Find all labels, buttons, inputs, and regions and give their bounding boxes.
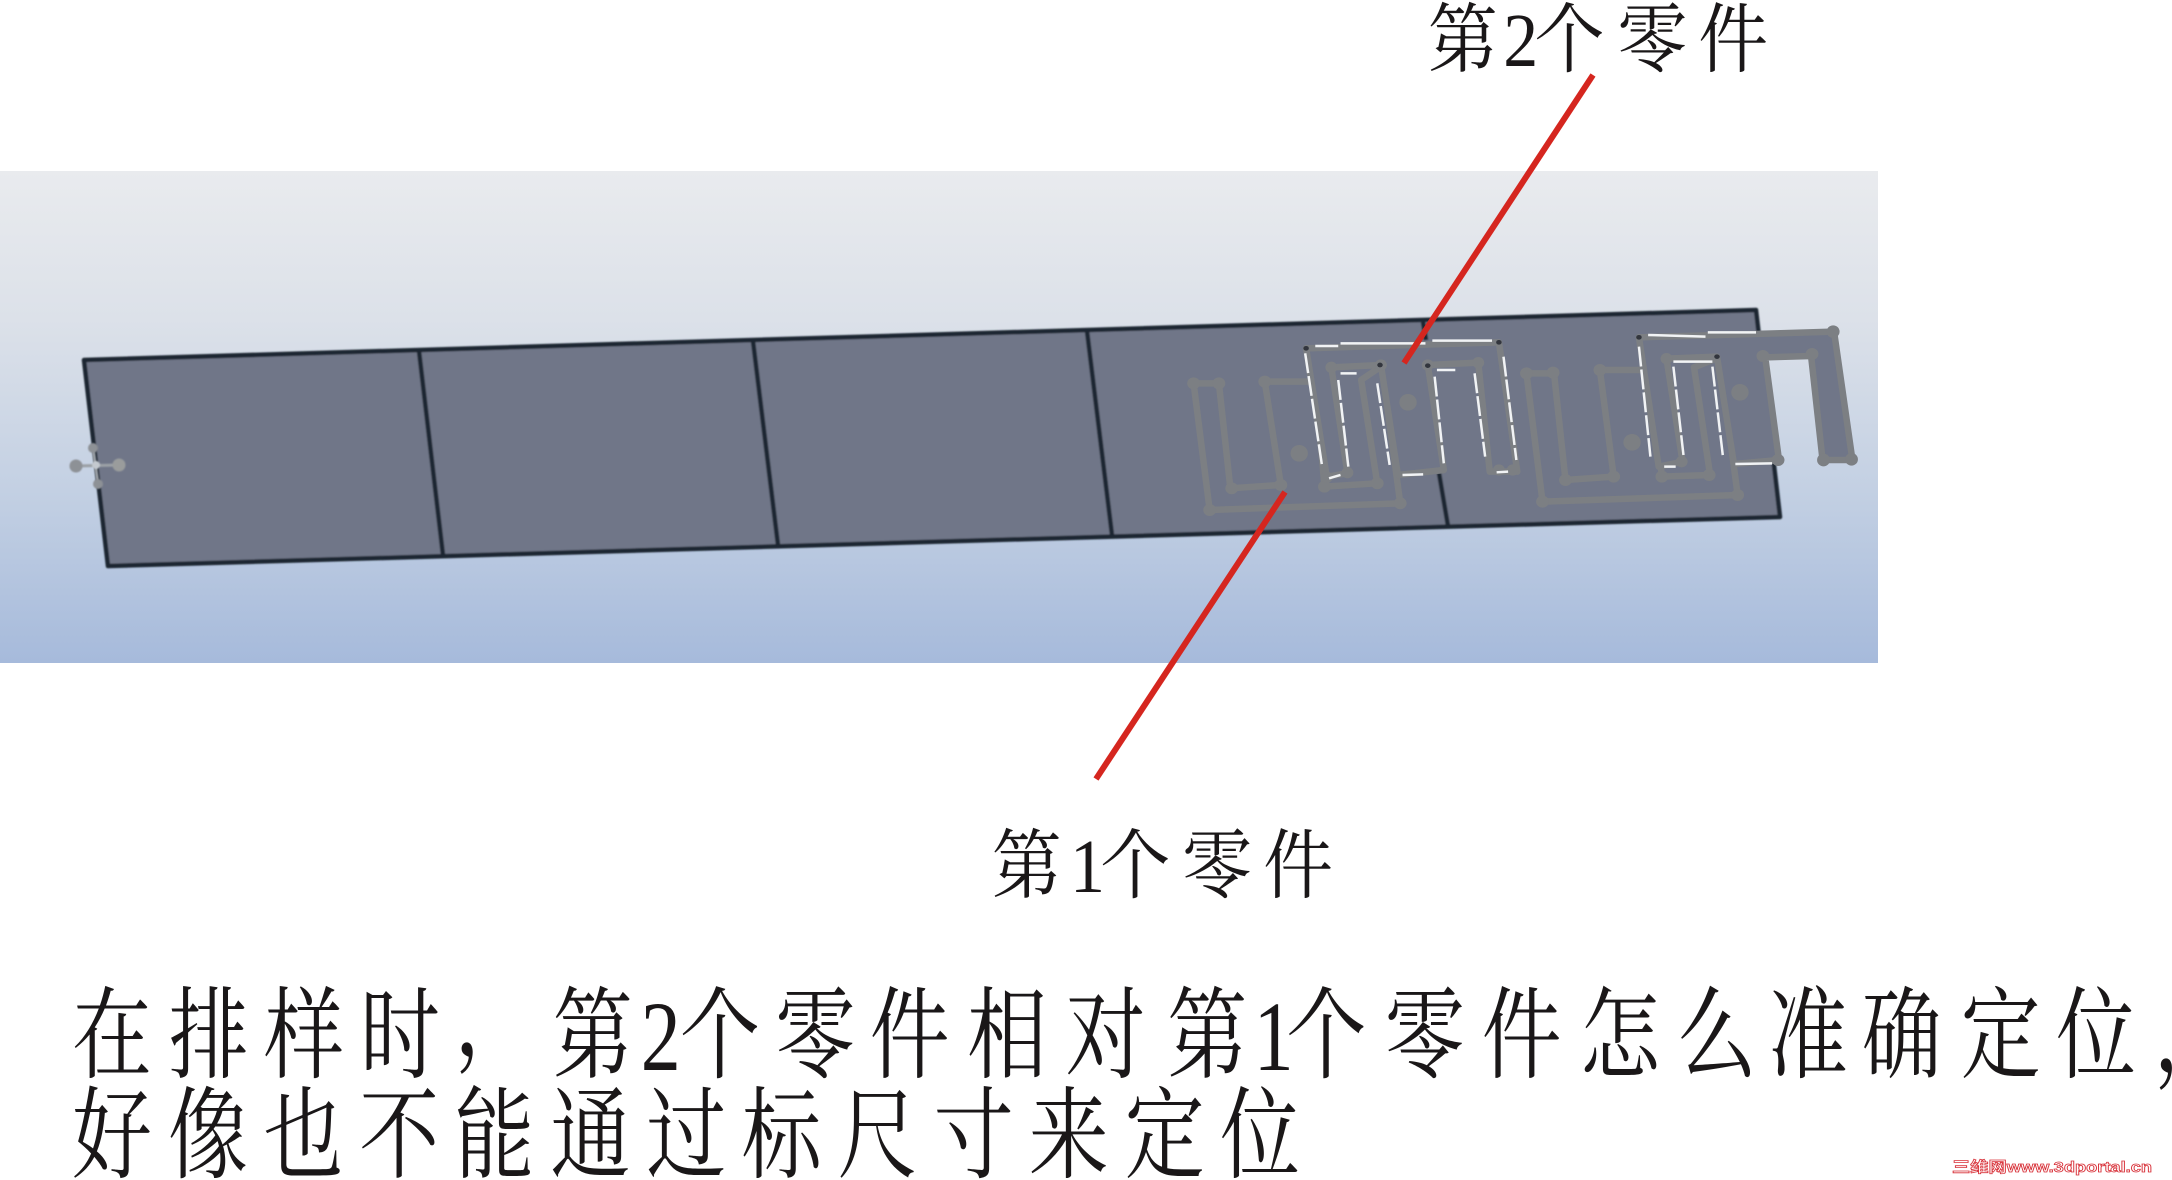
panel: CAD screenshot background bbox=[0, 171, 1878, 663]
arrow: leader to part 2 bbox=[1404, 75, 1593, 363]
sheet strip with four divider lines bbox=[84, 310, 1780, 566]
part: fourth snake outline extending past strip bbox=[1636, 325, 1858, 467]
part: third snake outline bbox=[1520, 357, 1744, 508]
text block: question line 1: 在排样时，第2个零件相对第1个零件怎么准确定位， bbox=[72, 965, 2172, 1092]
nested parts drawn in source coordinates bbox=[1187, 325, 1858, 516]
icon: origin marker at left of strip bbox=[70, 443, 126, 489]
label: part 1: 第1个零件 bbox=[992, 824, 1333, 909]
watermark: 三维网www.3dportal.cn bbox=[1952, 1158, 2152, 1176]
label: part 2: 第2个零件 bbox=[1428, 0, 1768, 83]
arrow: leader to part 1 bbox=[1096, 492, 1285, 779]
icon: locating marks on parts bbox=[1290, 384, 1749, 462]
part: first snake outline bbox=[1187, 366, 1407, 516]
part: second snake outline with white edges bbox=[1303, 340, 1519, 483]
